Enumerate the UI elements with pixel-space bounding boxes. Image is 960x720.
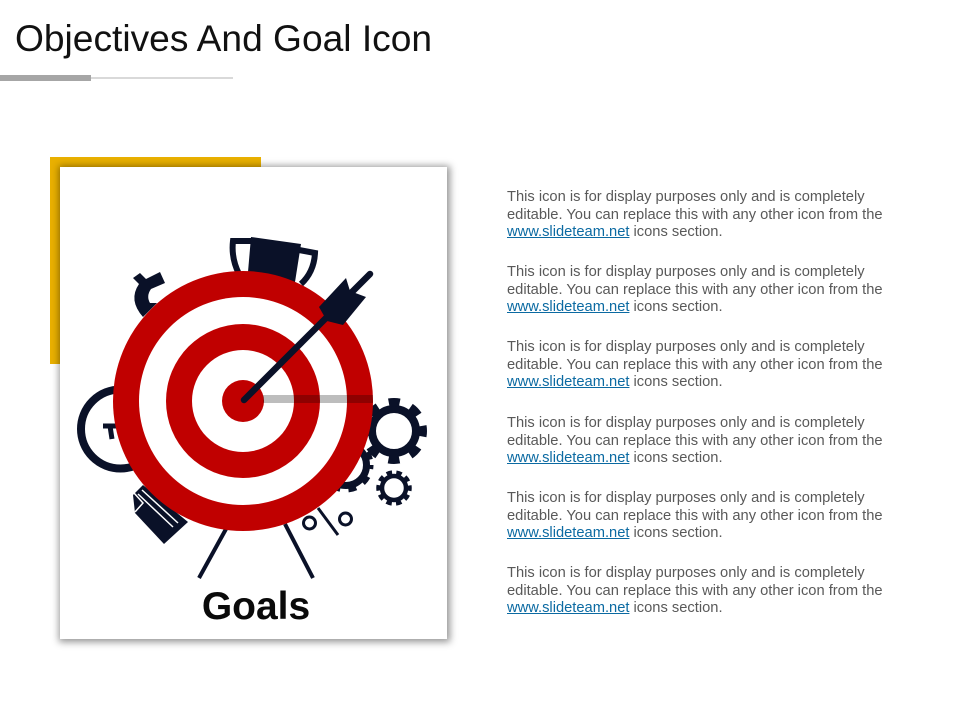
text block 3: www.slideteam.net icons section. [507, 374, 723, 390]
icon: percent sign [304, 508, 352, 535]
text block 4: This icon is for display purposes only and is completely [507, 415, 865, 431]
text block 1: This icon is for display purposes only and is completely [507, 189, 865, 205]
text block 3: This icon is for display purposes only and is completely [507, 339, 865, 355]
small gear [378, 472, 410, 504]
icon: trophy [233, 237, 315, 284]
yellow accent panel [50, 157, 261, 364]
icon: stopwatch [133, 272, 165, 317]
text block 2 [507, 264, 883, 315]
target rings [113, 271, 373, 531]
text block 5: editable. You can replace this with any other icon from the [507, 508, 883, 524]
text block 4 [507, 415, 883, 466]
text block 5: This icon is for display purposes only and is completely [507, 490, 865, 506]
text block 3: editable. You can replace this with any other icon from the [507, 356, 883, 372]
white card [60, 167, 447, 639]
text block 2: editable. You can replace this with any other icon from the [507, 282, 883, 298]
text block 5 [507, 490, 883, 541]
arrow [244, 274, 370, 400]
text block 4: editable. You can replace this with any other icon from the [507, 432, 883, 448]
text block 1: www.slideteam.net icons section. [507, 224, 723, 240]
goals label: Goals [202, 585, 310, 628]
text block 1 [507, 189, 883, 240]
title: Objectives And Goal Icon [15, 17, 432, 59]
large gear [365, 402, 423, 460]
text block 3 [507, 339, 883, 390]
text block 6: www.slideteam.net icons section. [507, 600, 723, 616]
text block 6: editable. You can replace this with any other icon from the [507, 582, 883, 598]
icon: gears [321, 402, 423, 504]
text block 6: This icon is for display purposes only and is completely [507, 565, 865, 581]
middle gear [321, 440, 371, 490]
text block 6 [507, 565, 883, 616]
target stand legs [199, 524, 313, 578]
text block 1: editable. You can replace this with any other icon from the [507, 206, 883, 222]
icon: clock [81, 390, 160, 468]
title underline [0, 75, 233, 81]
text block 4: www.slideteam.net icons section. [507, 450, 723, 466]
text block 2: This icon is for display purposes only and is completely [507, 264, 865, 280]
text block 2: www.slideteam.net icons section. [507, 299, 723, 315]
icon: book [133, 485, 188, 544]
arrow shadow [263, 395, 373, 403]
text block 5: www.slideteam.net icons section. [507, 525, 723, 541]
